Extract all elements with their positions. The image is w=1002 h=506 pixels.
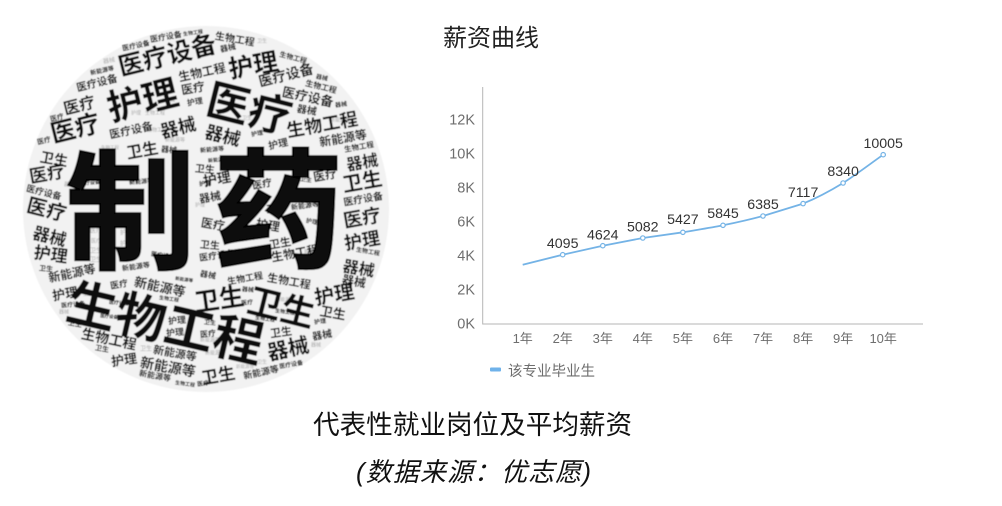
word group: small pale keywords: 护理 [120, 238, 132, 248]
word group: large and medium keywords: 生物工程 [214, 27, 256, 49]
x axis labels: 9年 [833, 331, 853, 346]
word group: small pale keywords: 器械 [102, 55, 116, 65]
word group: large and medium keywords: 医疗设备 [342, 187, 384, 209]
word group: large and medium keywords: 护理 [342, 224, 382, 256]
word group: large and medium keywords: 生物工程 [183, 28, 203, 38]
word group: large and medium keywords: 新能源等 [47, 260, 97, 286]
word group: small pale keywords: 护理 [262, 76, 272, 84]
data value labels: 7117 [788, 185, 818, 201]
x axis labels: 1年 [513, 331, 533, 346]
word group: large and medium keywords: 生物工程 [159, 294, 179, 304]
word group: small pale keywords: 卫生 [83, 290, 93, 298]
word group: large and medium keywords: 器械 [30, 219, 70, 251]
data value labels: 10005 [863, 136, 903, 152]
word group: small pale keywords: 医疗设备 [230, 232, 250, 238]
data value labels: 5082 [627, 220, 659, 236]
word group: large and medium keywords: 器械 [311, 325, 333, 343]
word group: small pale keywords: 器械 [64, 179, 76, 189]
word group: large and medium keywords: 器械 [219, 41, 237, 55]
word group: large and medium keywords: 卫生 [192, 277, 246, 319]
line chart: salary by year [449, 87, 923, 380]
word group: small pale keywords: 新能源等 [276, 296, 294, 303]
word group: large and medium keywords: 医疗 [196, 378, 210, 388]
word cloud: circular cloud of job keywords [23, 24, 389, 392]
word group: large and medium keywords: 医疗设备 [278, 357, 304, 371]
word group: small pale keywords [59, 38, 350, 370]
word group: large and medium keywords: 护理 [305, 216, 319, 226]
word group: large and medium keywords: 护理 [186, 95, 204, 109]
y axis labels [449, 112, 475, 332]
word group: large and medium keywords: 护理 [165, 325, 185, 339]
word group: small pale keywords: 卫生 [257, 358, 267, 366]
word group: large and medium keywords: 器械 [198, 187, 222, 207]
word group: large and medium keywords: 新能源等 [318, 125, 368, 151]
word group: large and medium keywords: 护理 [250, 128, 264, 138]
word group: large and medium keywords: 医疗设备 [121, 38, 151, 54]
word group: large and medium keywords: 生物工程 [284, 105, 360, 143]
word group: large and medium keywords: 卫生 [299, 174, 313, 184]
word group: large and medium keywords: 生物工程 [266, 269, 312, 293]
word group: large and medium keywords: 器械 [334, 99, 348, 109]
word group: large and medium keywords: 卫生 [94, 343, 110, 355]
x axis labels: 5年 [673, 331, 693, 346]
axes [483, 87, 923, 324]
word group: small pale keywords: 新能源等 [165, 136, 185, 144]
word group: large and medium keywords: 护理 [199, 178, 211, 188]
word group: large and medium keywords: 医疗 [61, 88, 97, 120]
word group: small pale keywords: 医疗 [327, 164, 337, 172]
word group: large and medium keywords: 护理 [167, 313, 187, 327]
word group: large and medium keywords: 医疗 [49, 111, 65, 125]
word group: small pale keywords: 医疗 [90, 226, 102, 234]
word group: small pale keywords: 器械 [311, 342, 321, 348]
word group: large and medium keywords: 护理 [225, 42, 281, 86]
word group: large and medium keywords: 器械 [264, 329, 312, 367]
word group: large and medium keywords: 医疗设备 [149, 29, 183, 45]
data point markers [560, 152, 885, 257]
word group: small pale keywords: 生物工程 [145, 110, 165, 116]
word group: large and medium keywords: 医疗设备 [114, 24, 220, 84]
word group: large and medium keywords: 新能源等 [175, 275, 194, 284]
word group: large and medium keywords: 新能源等 [139, 352, 197, 382]
word group: small pale keywords: 卫生 [257, 38, 267, 44]
word group: large and medium keywords: 卫生 [265, 198, 287, 216]
word group: large and medium keywords: 卫生 [199, 359, 237, 389]
word group: large and medium keywords: 器械 [157, 110, 199, 144]
data value labels: 4624 [587, 228, 619, 244]
word group: large and medium keywords: 卫生 [243, 273, 321, 337]
legend: 该专业毕业生 [508, 363, 595, 380]
x axis labels: 4年 [633, 331, 653, 346]
word group: large and medium keywords: 医疗设备 [150, 249, 176, 261]
x axis labels: 6年 [713, 331, 733, 346]
word group: large and medium keywords: 医疗设备 [100, 312, 119, 321]
word group: large and medium keywords: 医疗 [109, 276, 129, 292]
word group: large and medium keywords: 新能源等 [152, 341, 198, 365]
word group: large and medium keywords: 新能源等 [200, 143, 224, 155]
x axis labels: 8年 [793, 331, 813, 346]
word group: large and medium keywords: 护理 [201, 167, 233, 191]
word group: small pale keywords: 新能源等 [205, 350, 225, 356]
word group: large and medium keywords: 生物工程 [80, 323, 138, 355]
word group: large and medium keywords: 生物工程 [355, 244, 381, 258]
word group: small pale keywords: 护理 [120, 228, 132, 236]
word group: small pale keywords: 卫生 [90, 254, 102, 264]
word group: large and medium keywords: 卫生 [38, 147, 70, 171]
word group: small pale keywords: 器械 [165, 96, 175, 104]
word group: large and medium keywords: 护理 [255, 215, 281, 235]
large word: 生物工程: 生物工程 [60, 262, 272, 378]
word group: large and medium keywords: 医疗 [200, 214, 226, 234]
chart heading: 薪资曲线 [443, 25, 539, 52]
word group: large and medium keywords: 护理 [313, 316, 327, 326]
word group: large and medium keywords: 医疗设备 [25, 181, 63, 203]
word group: small pale keywords: 生物工程 [147, 126, 167, 134]
word group: large and medium keywords: 医疗 [36, 134, 52, 148]
word group: small pale keywords: 新能源等 [304, 248, 324, 256]
word group: large and medium keywords: 器械 [315, 71, 329, 83]
word group: large and medium keywords: 医疗 [341, 200, 383, 234]
data value labels: 8340 [827, 164, 859, 180]
word group: small pale keywords: 卫生 [140, 344, 152, 352]
word group: large and medium keywords: 卫生 [268, 233, 292, 253]
word group: small pale keywords: 新能源等 [236, 363, 254, 370]
y axis labels: 6K [457, 214, 475, 230]
word group: small pale keywords: 新能源等 [330, 116, 350, 124]
word group: large and medium keywords: 卫生 [39, 263, 53, 275]
x axis labels: 10年 [869, 331, 897, 346]
word group: large and medium keywords: 卫生 [340, 162, 384, 198]
word group: large and medium keywords: 新能源等 [138, 368, 172, 384]
word group: large and medium keywords: 生物工程 [343, 139, 375, 155]
word group: large and medium keywords: 卫生 [199, 236, 221, 252]
word group: large and medium keywords: 生物工程 [177, 59, 227, 85]
word group: large and medium keywords: 器械 [202, 118, 244, 152]
word group: small pale keywords: 医疗设备 [285, 162, 303, 169]
word group: large and medium keywords: 新能源等 [208, 156, 228, 164]
word group: large and medium keywords: 护理 [51, 281, 79, 305]
word group: large and medium keywords: 医疗设备 [75, 71, 120, 95]
word group: large and medium keywords: 生物工程 [275, 307, 295, 317]
word group: large and medium keywords: 卫生 [194, 160, 216, 176]
data value labels [547, 136, 903, 252]
word group: large and medium keywords [24, 24, 384, 389]
word group: small pale keywords: 生物工程 [101, 144, 119, 151]
x axis labels: 7年 [753, 331, 773, 346]
word group: large and medium keywords: 生物工程 [304, 78, 338, 96]
word group: large and medium keywords: 护理 [32, 238, 70, 268]
y axis labels: 10K [449, 146, 475, 162]
word group: large and medium keywords: 护理 [110, 348, 138, 370]
word group: large and medium keywords: 器械 [344, 146, 380, 176]
word group: large and medium keywords: 器械 [341, 271, 367, 291]
word group: large and medium keywords: 医疗设备 [109, 299, 129, 307]
y axis labels: 2K [457, 282, 475, 298]
word group: large and medium keywords: 医疗设备 [281, 81, 335, 111]
word group: large and medium keywords: 医疗设备 [256, 59, 316, 91]
word group: small pale keywords: 医疗 [91, 238, 101, 244]
word group: large and medium keywords: 卫生 [124, 134, 160, 164]
word group: large and medium keywords: 护理 [101, 64, 183, 132]
word group: large and medium keywords: 卫生 [67, 318, 83, 330]
word group: large and medium keywords: 医疗 [27, 157, 67, 189]
word group: large and medium keywords: 器械 [341, 252, 377, 282]
word group: large and medium keywords: 生物工程 [255, 314, 275, 324]
word group: large and medium keywords: 医疗设备 [61, 298, 85, 310]
word group: large and medium keywords: 医疗 [241, 297, 253, 307]
y axis labels: 4K [457, 248, 475, 264]
word group: small pale keywords: 器械 [59, 308, 69, 316]
word group: large and medium keywords: 器械 [242, 284, 254, 294]
word group: large and medium keywords: 医疗 [201, 66, 299, 146]
word group: large and medium keywords: 医疗设备 [108, 118, 154, 142]
word cloud background disc [23, 26, 389, 392]
largest word: 制: 制 [65, 109, 196, 297]
largest word: 药: 药 [213, 108, 344, 296]
word group: large and medium keywords: 生物工程 [278, 50, 308, 66]
word group: large and medium keywords: 新能源等 [246, 246, 266, 254]
data value labels: 6385 [747, 197, 779, 213]
x axis labels: 3年 [593, 331, 613, 346]
data value labels: 4095 [547, 236, 579, 252]
word group: small pale keywords: 护理 [131, 110, 141, 116]
word group: small pale keywords: 护理 [195, 202, 205, 208]
x axis labels: 2年 [553, 331, 573, 346]
word group: large and medium keywords: 新能源等 [133, 271, 187, 301]
word group: large and medium keywords: 器械 [199, 268, 217, 282]
word group: large and medium keywords: 护理 [267, 134, 289, 152]
word group: large and medium keywords: 卫生 [204, 317, 216, 327]
word group: large and medium keywords: 生物工程 [226, 268, 264, 288]
word group: large and medium keywords: 医疗设备 [198, 246, 236, 264]
x axis labels [513, 331, 897, 346]
word group: large and medium keywords: 卫生 [269, 323, 293, 341]
word group: large and medium keywords: 医疗 [46, 103, 104, 151]
data value labels: 5427 [667, 212, 699, 228]
word group: small pale keywords: 医疗 [119, 252, 131, 260]
caption: 代表性就业岗位及平均薪资 [313, 410, 632, 440]
word group: large and medium keywords: 生物工程 [270, 240, 320, 266]
y axis labels: 12K [449, 112, 475, 128]
word group: small pale keywords: 卫生 [242, 114, 252, 122]
word group: large and medium keywords: 医疗 [200, 328, 216, 340]
source note: (数据来源：优志愿) [356, 457, 591, 487]
word group: large and medium keywords: 护理 [312, 275, 356, 311]
word group: large and medium keywords: 医疗 [251, 174, 273, 192]
y axis labels: 0K [457, 316, 475, 332]
word group: large and medium keywords: 新能源等 [242, 362, 280, 382]
word group: small pale keywords: 卫生 [90, 246, 102, 254]
word group: large and medium keywords: 器械 [161, 144, 177, 156]
y axis labels: 8K [457, 180, 475, 196]
word group: large and medium keywords: 新能源等 [290, 199, 320, 213]
word group: large and medium keywords: 卫生 [319, 300, 347, 324]
data value labels: 5845 [707, 206, 739, 222]
word group: large and medium keywords: 医疗 [24, 189, 70, 227]
word group: large and medium keywords: 新能源等 [89, 63, 115, 77]
word group: large and medium keywords: 医疗设备 [80, 179, 100, 187]
word group: large and medium keywords: 新能源等 [121, 260, 151, 274]
word group: large and medium keywords: 医疗 [180, 78, 206, 98]
word group: large and medium keywords: 新能源等 [129, 175, 153, 187]
salary line [523, 155, 883, 265]
word group: small pale keywords: 医疗设备 [309, 199, 327, 206]
word group: large and medium keywords: 生物工程 [175, 379, 195, 389]
word group: large and medium keywords: 器械 [296, 100, 318, 118]
word group: large and medium keywords: 医疗 [312, 165, 338, 185]
word group: small pale keywords: 新能源等 [200, 336, 220, 344]
